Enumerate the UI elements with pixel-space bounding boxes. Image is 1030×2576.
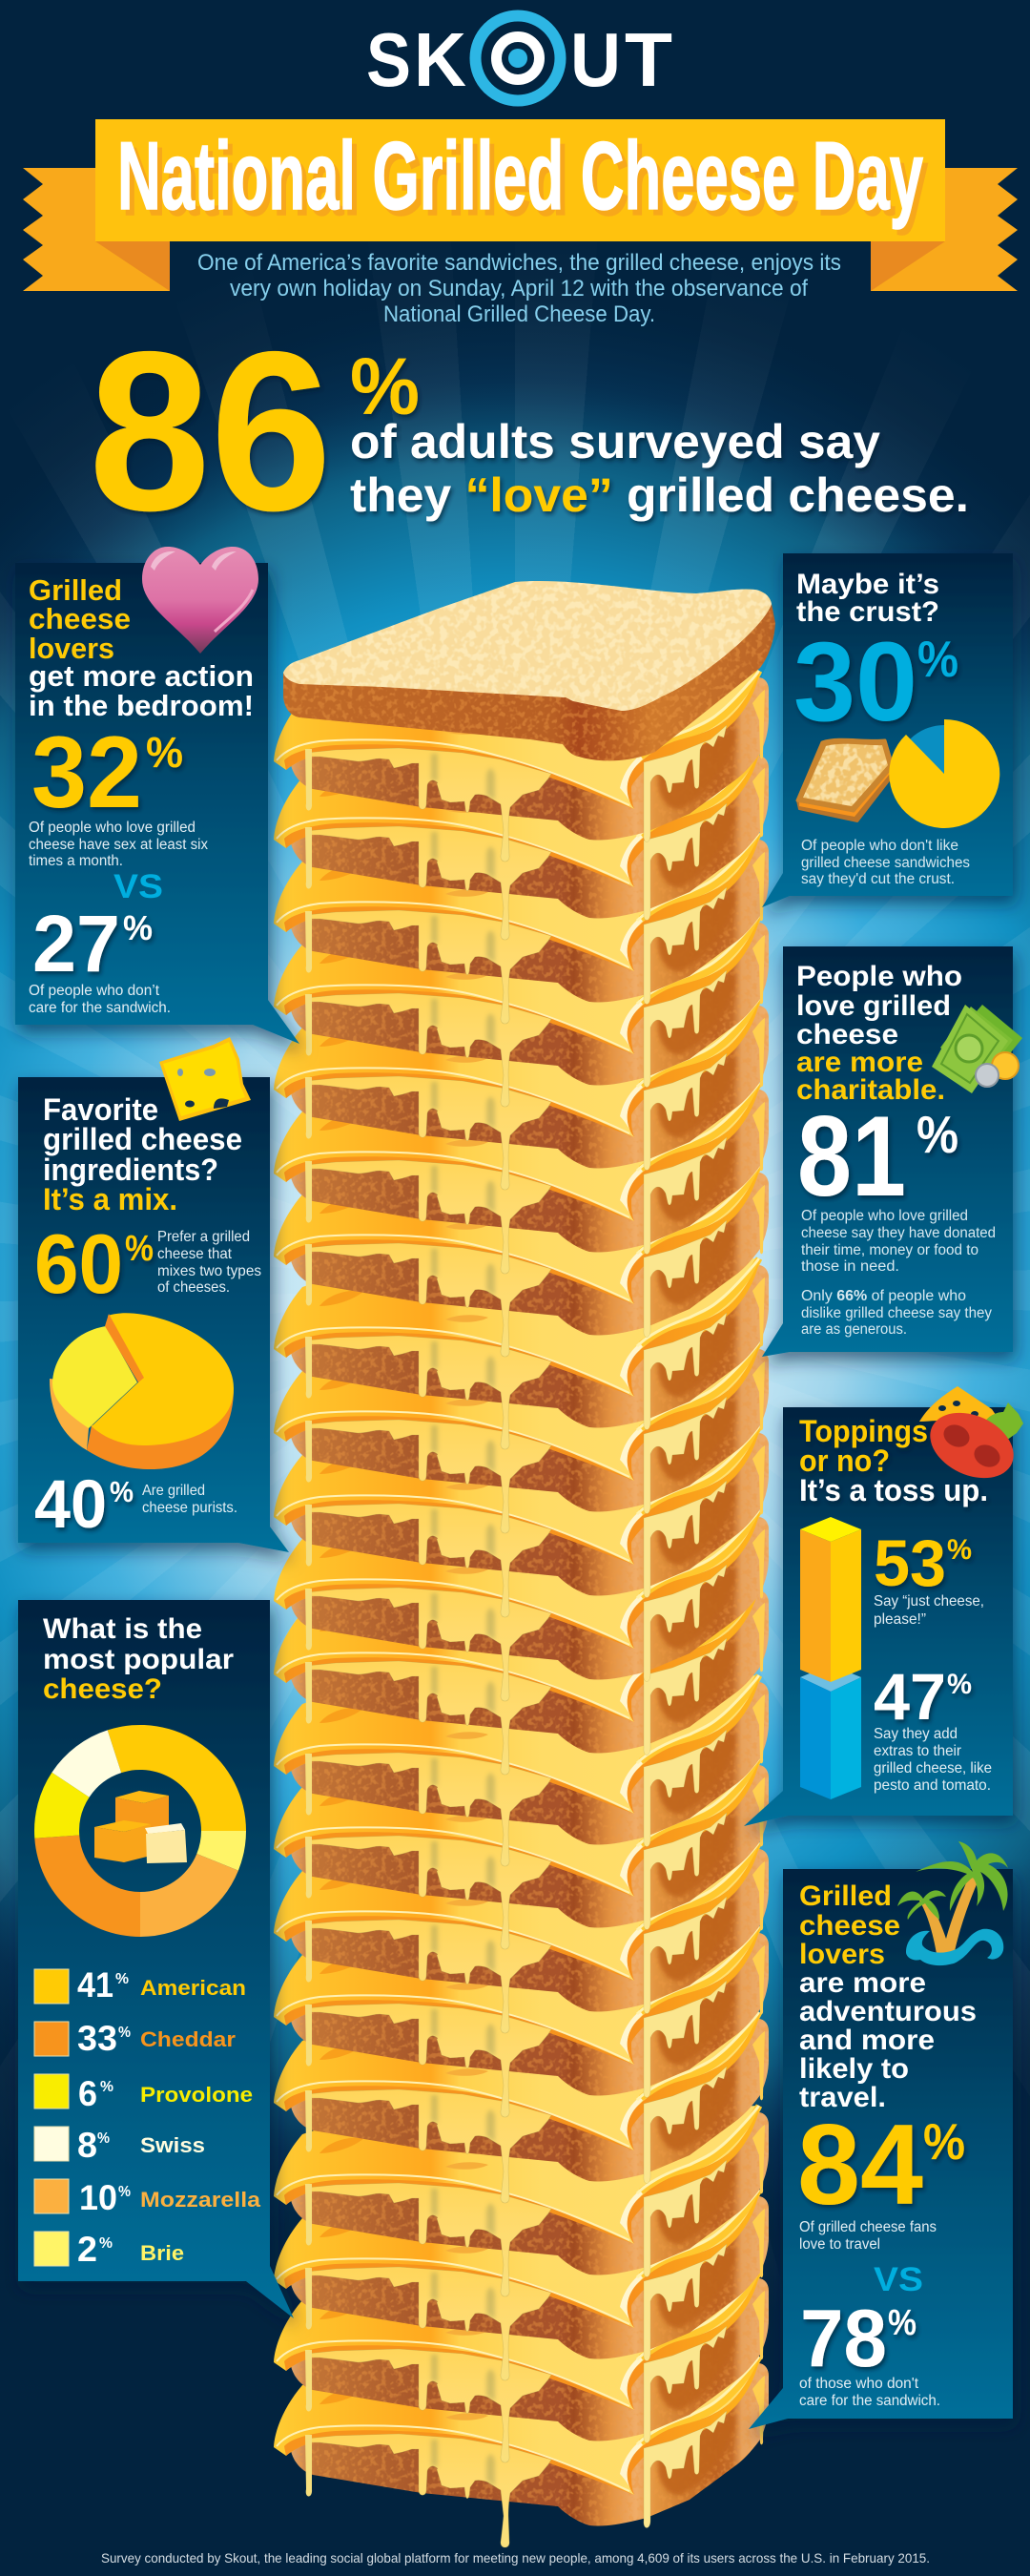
headline stat 86%: they “love” grilled cheese. xyxy=(350,468,969,522)
description: care for the sandwich. xyxy=(799,2393,940,2409)
stat 60%: % xyxy=(125,1229,154,1269)
3d pie chart xyxy=(50,1313,234,1469)
heading: Grilled xyxy=(29,573,122,607)
heading: cheese xyxy=(796,1019,898,1050)
footer source note: Survey conducted by Skout, the leading social global platform for meeting new people, among 4,609 of its users across the U.S. in February 2015. xyxy=(101,2550,930,2566)
stat 30%: % xyxy=(917,632,958,688)
panel: travel xyxy=(749,1841,1013,2429)
heading: love grilled xyxy=(796,990,951,1022)
legend: 6 xyxy=(78,2074,97,2113)
heading: People who xyxy=(796,961,962,992)
description: are as generous. xyxy=(801,1321,907,1338)
icon: palm trees xyxy=(897,1841,1008,1965)
legend: 41 xyxy=(77,1965,113,2005)
description: cheese have sex at least six xyxy=(29,837,208,853)
stat 47%: % xyxy=(947,1669,972,1700)
heading: adventurous xyxy=(799,1996,977,2027)
heading: are more xyxy=(799,1967,926,1999)
stat 27%: 27 xyxy=(32,899,120,988)
heading xyxy=(796,961,962,1106)
ribbon banner xyxy=(23,119,1018,291)
legend: % xyxy=(118,2184,131,2200)
stat 78%: % xyxy=(888,2303,917,2343)
description xyxy=(142,1483,237,1516)
legend: % xyxy=(99,2235,113,2252)
stat 81%: 81 xyxy=(797,1092,906,1220)
panel: most popular cheese xyxy=(18,1600,294,2318)
description: Are grilled xyxy=(142,1483,205,1499)
description: grilled cheese sandwiches xyxy=(801,855,970,871)
description: their time, money or food to xyxy=(801,1242,978,1258)
description xyxy=(799,2219,937,2253)
heading: ingredients? xyxy=(43,1153,218,1187)
pie chart xyxy=(889,719,999,828)
stat 32%: 32 xyxy=(31,715,142,829)
vs: VS xyxy=(113,868,163,905)
stat 40%: % xyxy=(110,1475,134,1508)
heading: likely to xyxy=(799,2053,909,2085)
logo: T xyxy=(625,17,672,102)
heading: Toppings xyxy=(799,1414,928,1448)
description: extras to their xyxy=(874,1743,962,1759)
heading: lovers xyxy=(799,1939,885,1970)
legend: 10 xyxy=(79,2178,117,2217)
heading: most popular xyxy=(43,1644,234,1675)
panel: crust xyxy=(762,553,1013,907)
legend: % xyxy=(97,2130,110,2147)
heading: get more action xyxy=(29,659,254,693)
legend: 33 xyxy=(77,2019,117,2058)
stat 47%: 47 xyxy=(874,1660,946,1734)
stat 84%: % xyxy=(923,2114,965,2171)
description: Of people who love grilled xyxy=(801,1208,968,1224)
stat 81%: % xyxy=(917,1105,958,1164)
heading: Grilled xyxy=(799,1880,892,1912)
description: pesto and tomato. xyxy=(874,1777,991,1794)
heading xyxy=(43,1092,242,1216)
description: Of grilled cheese fans xyxy=(799,2219,937,2235)
heading: cheese xyxy=(799,1910,900,1942)
icon: money xyxy=(932,1005,1022,1093)
donut chart xyxy=(34,1725,246,1937)
panel: ingredients xyxy=(18,1037,289,1552)
heading xyxy=(799,1414,988,1507)
heading: It’s a toss up. xyxy=(799,1473,988,1507)
heading: are more xyxy=(796,1047,923,1078)
icon: cheese wedge xyxy=(159,1037,251,1121)
heading: and more xyxy=(799,2025,935,2056)
description: say they'd cut the crust. xyxy=(801,871,955,887)
description xyxy=(801,838,970,887)
legend: American xyxy=(140,1976,246,2000)
legend: Swiss xyxy=(140,2133,205,2157)
description: of cheeses. xyxy=(157,1279,230,1296)
description: Say “just cheese, xyxy=(874,1593,984,1610)
description: Of people who don’t xyxy=(29,983,160,999)
description: Of people who don't like xyxy=(801,838,958,854)
legend: % xyxy=(115,1971,129,1987)
legend: % xyxy=(100,2079,113,2095)
heading: cheese xyxy=(29,602,131,635)
heading xyxy=(43,1613,234,1705)
icon: heart xyxy=(142,547,258,654)
description xyxy=(29,983,171,1016)
description: please!” xyxy=(874,1611,926,1628)
panel: charitable xyxy=(762,946,1022,1357)
logo: S xyxy=(366,17,411,102)
description: Of people who love grilled xyxy=(29,820,196,836)
description xyxy=(157,1229,261,1296)
legend: Provolone xyxy=(140,2083,253,2107)
legend: Brie xyxy=(140,2241,184,2265)
heading: It’s a mix. xyxy=(43,1182,177,1216)
sandwich stack xyxy=(274,581,775,2547)
description: cheese that xyxy=(157,1246,233,1262)
legend xyxy=(34,1965,261,2269)
logo: U xyxy=(570,17,621,102)
description xyxy=(801,1208,996,1338)
stat 78%: 78 xyxy=(800,2294,887,2384)
description: those in need. xyxy=(801,1258,899,1275)
icon: cheese, tomato and lettuce xyxy=(919,1386,1024,1491)
heading: Maybe it’s xyxy=(796,569,939,600)
legend: Mozzarella xyxy=(140,2188,261,2212)
description: of those who don't xyxy=(799,2376,919,2392)
description xyxy=(874,1726,992,1794)
stat 53%: 53 xyxy=(874,1527,946,1600)
description xyxy=(29,820,208,869)
stat 84%: 84 xyxy=(797,2101,923,2229)
description: Prefer a grilled xyxy=(157,1229,250,1245)
logo xyxy=(366,15,672,102)
intro text xyxy=(197,250,841,327)
description xyxy=(874,1593,984,1628)
icon: cheese blocks xyxy=(94,1791,187,1863)
stat 30%: 30 xyxy=(793,619,917,745)
heading: What is the xyxy=(43,1613,202,1645)
stat 40%: 40 xyxy=(34,1467,107,1543)
heading: or no? xyxy=(799,1444,890,1478)
headline stat 86%: % xyxy=(350,342,420,431)
description xyxy=(799,2376,940,2409)
description: grilled cheese, like xyxy=(874,1760,992,1776)
heading: grilled cheese xyxy=(43,1122,242,1156)
description: dislike grilled cheese say they xyxy=(801,1305,992,1321)
description: mixes two types xyxy=(157,1263,261,1279)
headline stat 86%: 86 xyxy=(89,305,332,558)
icon: toast xyxy=(797,739,894,821)
intro text: One of America’s favorite sandwiches, the grilled cheese, enjoys its xyxy=(197,250,841,276)
vs: VS xyxy=(874,2261,923,2298)
heading: cheese? xyxy=(43,1673,162,1705)
description: cheese say they have donated xyxy=(801,1225,996,1241)
description: love to travel xyxy=(799,2236,880,2253)
description: times a month. xyxy=(29,853,123,869)
heading: the crust? xyxy=(796,596,939,628)
heading xyxy=(29,573,254,722)
description: Only 66% of people who xyxy=(801,1288,966,1304)
top bread slice xyxy=(283,581,775,760)
stat 32%: % xyxy=(146,728,183,777)
legend: % xyxy=(118,2025,131,2041)
legend: 8 xyxy=(77,2126,97,2165)
heading: lovers xyxy=(29,632,114,665)
panel: bedroom xyxy=(15,547,299,1044)
headline stat 86% xyxy=(89,305,969,558)
bar chart xyxy=(800,1517,861,1799)
description: care for the sandwich. xyxy=(29,1000,171,1016)
heading xyxy=(799,1880,977,2113)
intro text: National Grilled Cheese Day. xyxy=(383,301,655,327)
legend: Cheddar xyxy=(140,2027,236,2051)
heading: Favorite xyxy=(43,1092,158,1127)
stat 27%: % xyxy=(123,908,153,947)
intro text: very own holiday on Sunday, April 12 with the observance of xyxy=(230,276,808,301)
headline stat 86%: of adults surveyed say xyxy=(350,415,880,468)
logo: K xyxy=(414,17,466,102)
description: Say they add xyxy=(874,1726,958,1742)
heading: travel. xyxy=(799,2082,886,2113)
panel: toppings xyxy=(744,1386,1024,1826)
heading: charitable. xyxy=(796,1074,945,1106)
heading xyxy=(796,569,939,628)
heading: in the bedroom! xyxy=(29,689,254,722)
legend: 2 xyxy=(77,2230,97,2269)
description: cheese purists. xyxy=(142,1500,237,1516)
stat 53%: % xyxy=(947,1534,972,1566)
stat 60%: 60 xyxy=(34,1216,123,1311)
